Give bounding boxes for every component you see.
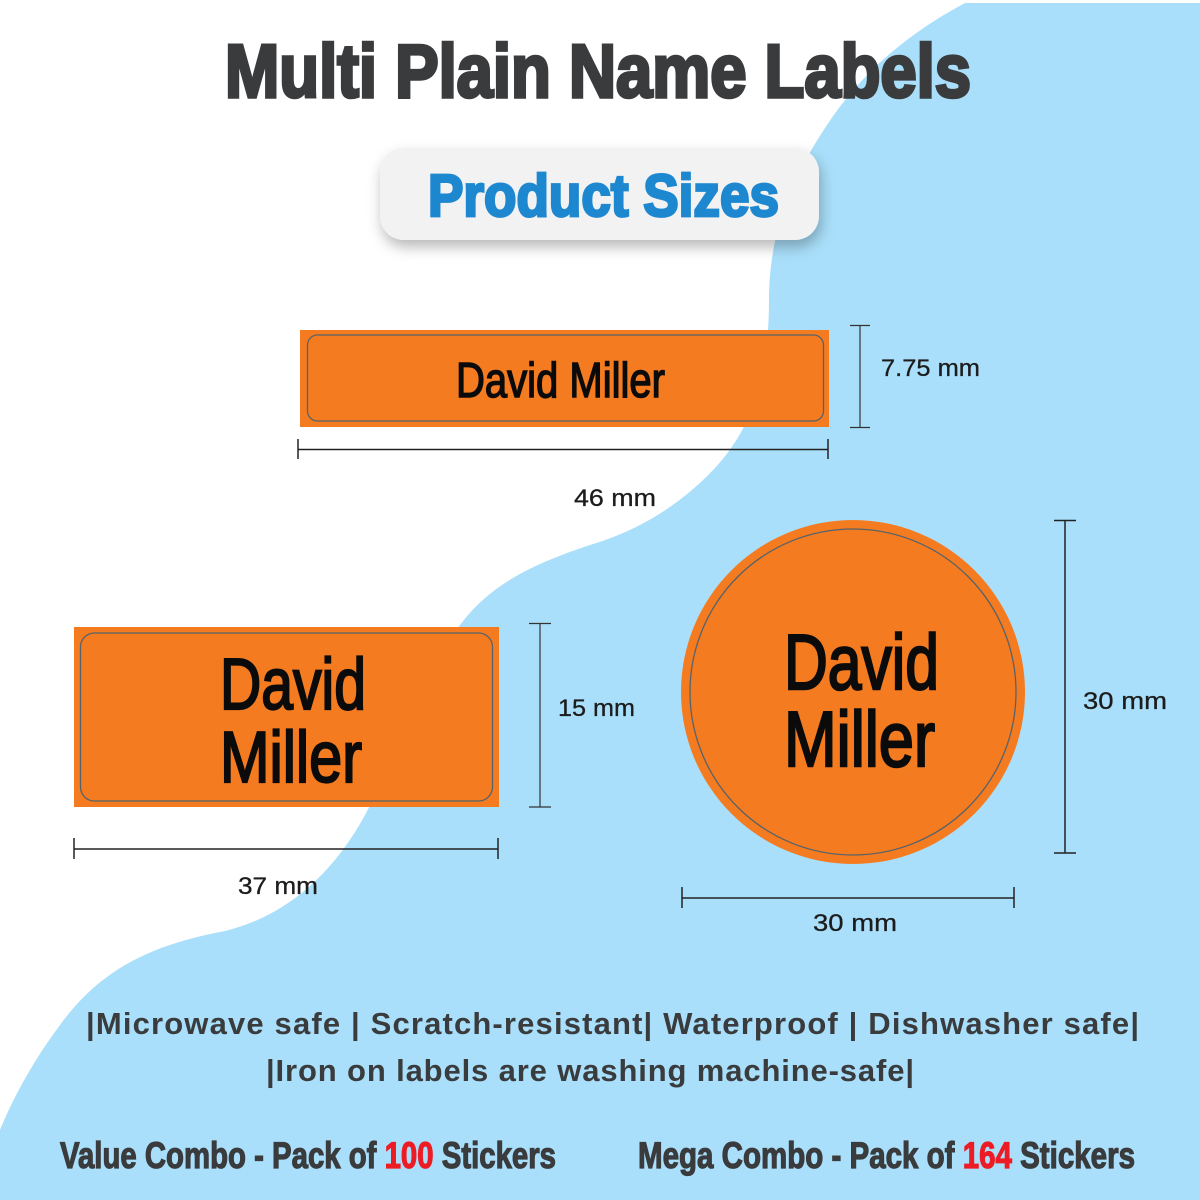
dimension: 46 mm: 46 mm — [574, 485, 656, 512]
subtitle text: Product Sizes — [428, 163, 779, 229]
label: small rectangle: David Miller — [456, 354, 665, 408]
mega combo text: Mega Combo - Pack of 164 Stickers — [638, 1135, 1135, 1176]
label: round sticker — [681, 520, 1025, 864]
label: small rectangle — [300, 330, 829, 427]
dimension: 7.75 mm — [850, 325, 980, 428]
dimension: 7.75 mm: 7.75 mm — [881, 355, 980, 382]
dimension: 15 mm: 15 mm — [558, 695, 635, 722]
value combo text: Value Combo - Pack of 100 Stickers — [60, 1135, 556, 1176]
label: round sticker: David — [784, 618, 939, 706]
dimension: 37 mm — [74, 838, 498, 900]
label: medium rectangle: Miller — [220, 718, 362, 798]
features text: |Iron on labels are washing machine-safe| — [266, 1053, 914, 1088]
subtitle pill — [380, 148, 819, 240]
dimension: horizontal 30 mm: 30 mm — [813, 910, 897, 937]
features text — [86, 1006, 1139, 1088]
dimension: 15 mm — [529, 623, 635, 807]
label: medium rectangle — [74, 627, 499, 807]
dimension: 37 mm: 37 mm — [238, 873, 318, 900]
dimension: 46 mm — [298, 439, 828, 512]
label: round sticker: Miller — [784, 695, 935, 783]
dimension: vertical 30 mm: 30 mm — [1083, 688, 1167, 715]
dimension: horizontal 30 mm — [682, 887, 1014, 937]
dimension: vertical 30 mm — [1054, 520, 1167, 853]
title: Multi Plain Name Labels — [225, 29, 971, 113]
features text: |Microwave safe | Scratch-resistant| Waterproof | Dishwasher safe| — [86, 1006, 1139, 1041]
label: medium rectangle: David — [220, 645, 366, 725]
